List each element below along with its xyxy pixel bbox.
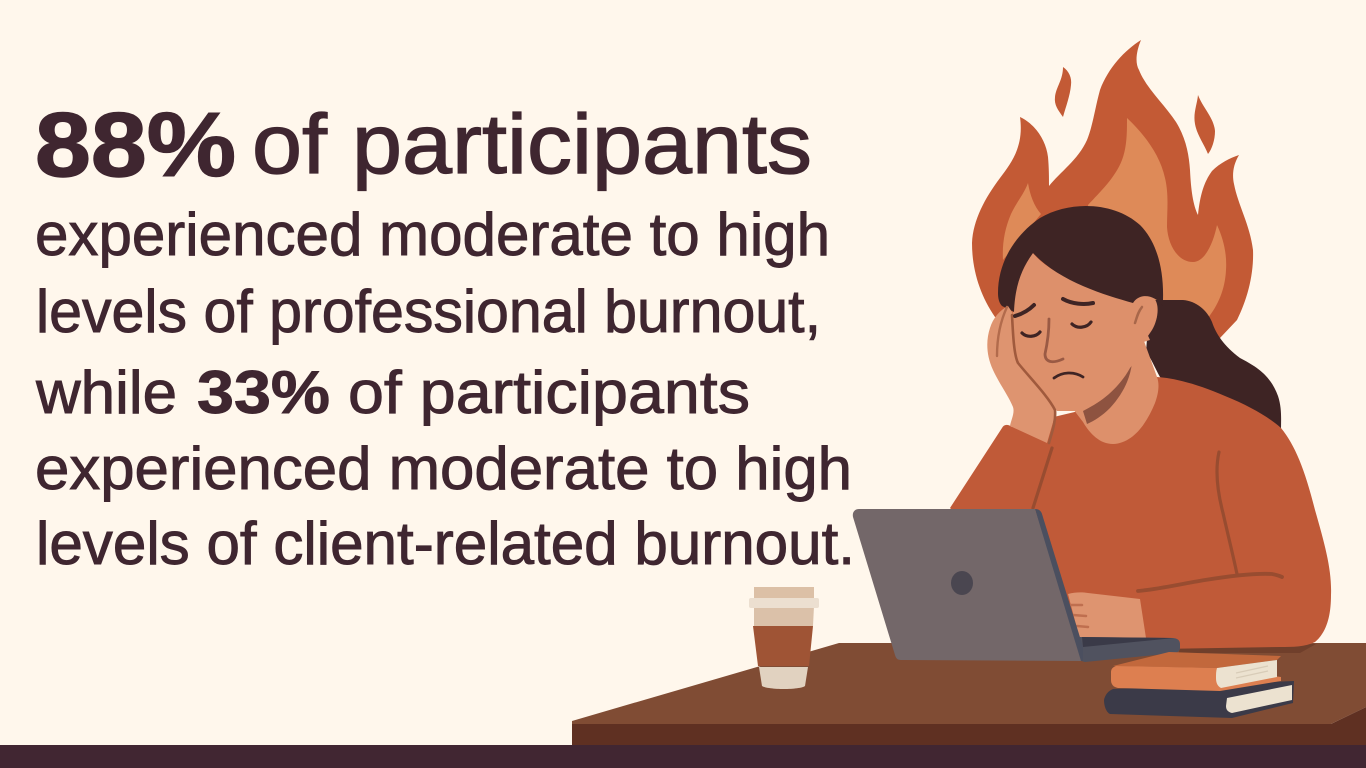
stack of books [1104, 652, 1294, 718]
bottom bar [0, 745, 1366, 768]
stat: 88% of participants: 88% [35, 95, 236, 196]
body line: while 33% of participants [35, 359, 750, 426]
nose [1045, 319, 1063, 362]
keyboard [1082, 637, 1174, 647]
hair [998, 206, 1163, 312]
body line: levels of client-related burnout: levels of client-related burnout. [36, 510, 855, 577]
body line: while 33% of participants: while [35, 359, 177, 426]
supporting hand [987, 306, 1056, 443]
face [1012, 253, 1150, 411]
desk [572, 643, 1366, 745]
icon: right spark [1194, 95, 1215, 154]
eyebrows [1015, 299, 1093, 316]
icon: left spark [1055, 67, 1071, 117]
ponytail [1146, 300, 1281, 430]
desk front [572, 707, 1366, 745]
icon: flames [972, 40, 1253, 338]
headline text block [35, 95, 855, 577]
laptop [853, 509, 1180, 662]
body line: experienced moderate to high: experienced moderate to high [35, 435, 852, 502]
stat: 88% of participants [35, 95, 812, 196]
sweater creases [1033, 448, 1282, 591]
ear crease [1135, 307, 1142, 323]
body line: levels of professional burnout: levels of professional burnout, [36, 278, 821, 345]
stat: 88% of participants: of participants [252, 97, 812, 191]
neck shadow [1083, 363, 1132, 424]
body line: while 33% of participants: 33% [197, 359, 330, 426]
laptop lid [853, 509, 1081, 661]
body line: experienced moderate to high: experienced moderate to high [35, 201, 830, 268]
laptop logo [951, 571, 973, 595]
illustration: burned-out woman at desk [572, 40, 1366, 745]
sweater [950, 377, 1331, 650]
shadow on desk [1179, 644, 1316, 653]
closed eyes [1022, 322, 1091, 336]
ear [1128, 295, 1158, 345]
lower book [1104, 681, 1294, 718]
laptop hinge edge [1035, 509, 1083, 661]
finger and cheek creases [997, 307, 1055, 443]
desk top [572, 643, 1366, 724]
typing hand [1068, 592, 1146, 640]
body line: while 33% of participants: of participants [348, 359, 750, 426]
coffee cup [749, 587, 819, 689]
upper book [1111, 652, 1281, 691]
frowning mouth [1054, 373, 1083, 378]
laptop base [1078, 637, 1180, 662]
neck and collar [1070, 330, 1158, 444]
